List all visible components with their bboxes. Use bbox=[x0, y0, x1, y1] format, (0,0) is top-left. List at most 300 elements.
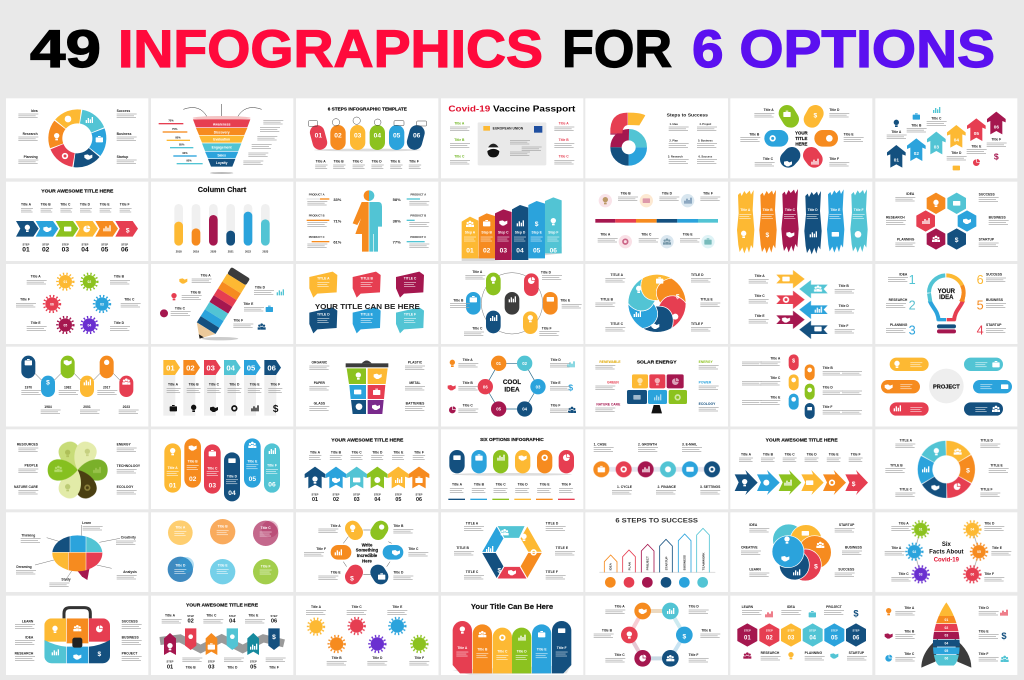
tags bbox=[163, 360, 281, 375]
heading: Column Chart bbox=[198, 185, 247, 194]
panel: spiral: TITLE D bbox=[691, 273, 704, 277]
heading: YOUR AWESOME TITLE HERE bbox=[41, 189, 114, 195]
panel: hexagons bbox=[875, 182, 1017, 261]
panel: brush strokes: Title C bbox=[785, 208, 796, 212]
panel: write something incredible: Title A bbox=[331, 524, 341, 528]
funnel layers bbox=[193, 119, 250, 167]
panel: cool idea: $ bbox=[568, 382, 573, 392]
panel: six steps outline arrows: BUSINESS bbox=[683, 555, 687, 570]
panel: hexagon row: 03 bbox=[788, 635, 795, 641]
tabs: Title A bbox=[457, 646, 468, 650]
panel: banners with title bbox=[296, 264, 438, 344]
panel: male female figure: 77% bbox=[393, 239, 401, 244]
banners: 02 bbox=[483, 248, 491, 255]
panel: 6 steps capsules: 06 bbox=[413, 132, 421, 139]
panel: funnel: Engagement bbox=[212, 146, 233, 150]
panel: ribbons: Title D bbox=[227, 665, 238, 669]
panel: hexagon row: STEP bbox=[744, 629, 751, 633]
panel: up arrows with title: Title D bbox=[372, 450, 383, 454]
panel: six options cylinders bbox=[441, 429, 583, 509]
panel: rocket: 06 bbox=[944, 657, 948, 661]
numbered nodes: 04 bbox=[522, 407, 528, 412]
panel: clover: ENERGY bbox=[117, 443, 132, 447]
panel: tall capsules: 01 bbox=[169, 483, 177, 490]
panel: petals: Title D bbox=[829, 108, 840, 112]
panel: hexagons: IDEA bbox=[906, 192, 915, 196]
panel: swirl circles: CREATIVE bbox=[741, 546, 758, 550]
panel: interlocking arrows: Title E bbox=[755, 314, 765, 318]
panel: brain puzzle: Dreaming bbox=[16, 565, 32, 569]
panel: light bulb: 6 bbox=[977, 273, 984, 287]
panel: cycle ring: Idea bbox=[31, 109, 38, 113]
panel: ribbons: Title E bbox=[248, 614, 259, 618]
panel: year timeline capsules bbox=[6, 347, 148, 427]
panel: 6 steps capsules: Title C bbox=[353, 159, 363, 163]
panel: hexagon row: PLANNING bbox=[805, 651, 822, 655]
panel: rocket: Title F bbox=[979, 652, 988, 656]
panel: virus options: Title E bbox=[31, 321, 41, 325]
panel: ribbons: STEP bbox=[250, 660, 257, 664]
panel: cool idea: COOL bbox=[503, 379, 521, 386]
panel: funnel: 95% bbox=[186, 159, 192, 163]
panel: cool idea: Title D bbox=[551, 358, 561, 362]
heading: 6 STEPS TO SUCCESS bbox=[615, 518, 699, 525]
panel: tall capsules: Title D bbox=[227, 474, 238, 478]
panel: timeline with icons: Title F bbox=[703, 191, 713, 195]
panel: watercolor blobs: Title F bbox=[261, 564, 271, 568]
banners: Step B bbox=[481, 231, 493, 235]
panel: big arrows bbox=[730, 429, 872, 509]
panel: swirl circles: $ bbox=[814, 563, 818, 570]
panel: tall capsules: Title E bbox=[247, 459, 258, 463]
panel: arrow steps: Title E bbox=[100, 203, 110, 207]
panel: ribbons: STEP bbox=[187, 614, 194, 618]
panel: brain puzzle: Study bbox=[61, 578, 71, 582]
rocket body bbox=[932, 602, 960, 666]
panel: ribbons: Title C bbox=[206, 614, 217, 618]
panel: funnel: Sales bbox=[217, 153, 226, 157]
ribbons: $ bbox=[272, 634, 276, 641]
panel: capsule ring: Title B bbox=[453, 298, 464, 302]
panel: zig-zag capsules: Title B bbox=[823, 366, 833, 370]
panel: timeline with icons: Title A bbox=[600, 233, 611, 237]
panel: puzzle ring: TITLE A bbox=[900, 439, 913, 443]
panel: cycle ring: Success bbox=[117, 109, 130, 113]
panel: six facts covid: 05 bbox=[977, 550, 981, 554]
panel: banners with title: TITLE B bbox=[360, 276, 374, 280]
panel: funnel: 70% bbox=[168, 119, 174, 123]
numbered nodes: 06 bbox=[483, 384, 488, 389]
panel: column chart: 2022 bbox=[245, 250, 251, 254]
panel: virus options: 06 bbox=[50, 302, 54, 306]
numbered nodes: 03 bbox=[536, 384, 541, 389]
panel: brain puzzle: Thinking bbox=[21, 533, 35, 537]
panel: write something incredible bbox=[296, 512, 438, 592]
panel: covid vaccine passport bbox=[441, 98, 583, 178]
panel: watercolor blobs: Title D bbox=[175, 564, 186, 568]
six shape bbox=[610, 113, 645, 160]
panel: virus options: 04 bbox=[87, 323, 91, 327]
panel: light bulb: PLANNING bbox=[890, 323, 908, 327]
panel: swirl circles: BUSINESS bbox=[845, 546, 863, 550]
panel: numbered tags: Title C bbox=[209, 383, 220, 387]
panel: hexagon ring of circles: Title D bbox=[689, 605, 699, 609]
panel: petals bbox=[730, 98, 872, 178]
panel: rising arrows: 03 bbox=[934, 144, 939, 149]
panel: arrow steps: STEP bbox=[82, 243, 89, 247]
panel: six options cylinders: Title D bbox=[518, 482, 528, 486]
panel: up arrows with title: 05 bbox=[395, 497, 401, 503]
panel: column chart: 2020 bbox=[210, 250, 217, 254]
timeline bar bbox=[595, 219, 718, 223]
panel: column chart: 2018 bbox=[176, 250, 182, 254]
panel: capsule ring: Title E bbox=[560, 298, 571, 302]
panel: write something incredible: Title B bbox=[393, 524, 404, 528]
panel: virus options: 01 bbox=[63, 280, 67, 284]
panel: male female figure: 61% bbox=[333, 239, 342, 244]
tags: 02 bbox=[186, 363, 195, 372]
panel: clover: PEOPLE bbox=[24, 464, 39, 468]
panel: hexagon row bbox=[730, 596, 872, 675]
panel: ribbons: 04 bbox=[229, 619, 236, 625]
tags: 05 bbox=[247, 363, 256, 372]
panel: ribbons: 02 bbox=[188, 619, 194, 625]
panel: numbered tags: Title A bbox=[168, 383, 179, 387]
panel: arrow steps: STEP bbox=[121, 243, 128, 247]
panel: brush strokes: Title B bbox=[763, 208, 773, 212]
banners: 04 bbox=[516, 248, 524, 255]
panel: column chart bbox=[151, 182, 293, 261]
panel: briefcase: BUSINESS bbox=[122, 635, 139, 639]
panel: rising arrows: $ bbox=[994, 151, 999, 161]
panel: number six bbox=[585, 98, 728, 178]
panel: briefcase: $ bbox=[97, 651, 101, 658]
panel: hexagon row: 06 bbox=[853, 635, 860, 641]
hexagon segments: $ bbox=[497, 567, 501, 574]
panel: virus scatter: Title E bbox=[392, 605, 403, 609]
panel: zig-zag capsules: Title D bbox=[823, 386, 833, 390]
panel: light bulb: SUCCESS bbox=[986, 273, 1003, 277]
panel: virus scatter bbox=[296, 596, 438, 675]
panel: ribbons: Title B bbox=[186, 665, 196, 669]
tags: 03 bbox=[206, 363, 215, 372]
panel: hexagons: $ bbox=[955, 237, 959, 244]
panel: rocket: Title A bbox=[904, 606, 915, 610]
panel: hexagons: BUSINESS bbox=[989, 215, 1006, 219]
panel: brush strokes: Title D bbox=[808, 208, 818, 212]
panel: tall capsules: 03 bbox=[209, 483, 216, 490]
panel: hexagon row: STEP bbox=[788, 629, 795, 633]
panel: watercolor blobs: Title C bbox=[261, 526, 271, 530]
tabs: Title F bbox=[557, 646, 567, 650]
panel: hexagon ring of circles: Title E bbox=[701, 629, 712, 633]
panel: virus options: 05 bbox=[63, 323, 67, 327]
banners: Step C bbox=[498, 231, 509, 235]
panel: ribbons: 06 bbox=[271, 619, 277, 625]
panel: pencil: Title E bbox=[243, 302, 254, 306]
panel: hexagon row: 05 bbox=[831, 635, 838, 641]
banners: Step A bbox=[465, 231, 476, 235]
panel: briefcase: PROJECT bbox=[122, 651, 137, 655]
panel: hexagon ring: TITLE C bbox=[466, 570, 479, 574]
panel: circle chain: 3. E-MAIL bbox=[682, 442, 697, 446]
panel: tall capsules: 04 bbox=[228, 490, 236, 497]
panel: tall capsules: Title A bbox=[168, 466, 178, 470]
heading: YOUR TITLE CAN BE HERE bbox=[315, 302, 420, 311]
panel: hexagon ring of circles: Title C bbox=[615, 653, 625, 657]
panel: tall capsules: 06 bbox=[268, 482, 276, 489]
panel: hexagon row: STEP bbox=[809, 629, 816, 633]
panel: 6 steps capsules: Title E bbox=[390, 159, 401, 163]
capsules: $ bbox=[46, 379, 50, 386]
panel: capsule ring: Title A bbox=[472, 270, 483, 274]
panel: circle chain: 1. CASE bbox=[594, 442, 607, 446]
panel: brain puzzle: Creativity bbox=[121, 536, 136, 540]
panel: light bulb: BUSINESS bbox=[986, 298, 1004, 302]
tabs: Title B bbox=[477, 648, 488, 652]
panel: rocket: 04 bbox=[944, 641, 948, 645]
panel: capsule ring: Title F bbox=[542, 326, 552, 330]
panel: year timeline capsules: 1982 bbox=[64, 385, 72, 389]
center heading: Six bbox=[942, 542, 951, 548]
panel: male female figure: 36% bbox=[393, 218, 401, 223]
center heading: Covid-19 bbox=[934, 558, 960, 564]
panel: big arrows: Title F bbox=[851, 453, 861, 457]
panel: hexagon row: RESEARCH bbox=[761, 651, 780, 655]
panel: ribbons: STEP bbox=[208, 660, 215, 664]
panel: virus options: Title A bbox=[31, 275, 41, 279]
panel: puzzle ring: TITLE F bbox=[980, 488, 993, 492]
panel: funnel: 75% bbox=[172, 127, 178, 131]
panel: spiral: $ bbox=[676, 293, 680, 300]
title: 49 bbox=[30, 20, 101, 79]
banners bbox=[462, 197, 562, 260]
heading: Your Title Can Be Here bbox=[471, 602, 553, 611]
panel: cool idea: Title E bbox=[551, 381, 561, 385]
panel: hexagon ring of circles bbox=[585, 596, 728, 675]
panel: solar energy: RENEWABLE bbox=[599, 360, 621, 364]
panel: rising arrows bbox=[875, 98, 1017, 178]
panel: swirl circles: STARTUP bbox=[839, 523, 855, 527]
outline arrows bbox=[604, 528, 709, 572]
panel: tall capsules: Title B bbox=[188, 460, 198, 464]
panel: up arrows with title: 03 bbox=[354, 497, 360, 503]
panel: brush strokes: Title A bbox=[740, 208, 751, 212]
panel: rising arrows: Title C bbox=[931, 117, 942, 121]
panel: six steps outline arrows: PROJECT bbox=[646, 556, 650, 570]
panel: brain puzzle bbox=[6, 512, 148, 592]
panel: year timeline capsules: 2017 bbox=[103, 385, 111, 389]
panel: hexagon ring of circles: Title A bbox=[615, 605, 625, 609]
panel: covid vaccine passport: Title C bbox=[559, 155, 569, 159]
panel: spiral bbox=[585, 264, 728, 344]
panel: six facts covid: 06 bbox=[970, 573, 974, 577]
panel: light bulb: YOUR bbox=[938, 289, 956, 295]
panel: petals: YOUR bbox=[795, 131, 808, 136]
panel: circle chain: 1. CYCLE bbox=[617, 485, 633, 489]
panel: puzzle ring: TITLE E bbox=[990, 463, 1003, 467]
panel: rocket: Title D bbox=[979, 606, 989, 610]
panel: write something incredible: Write bbox=[362, 542, 373, 547]
panel: male female figure: PRODUCT A bbox=[309, 192, 325, 196]
panel: pencil: Title A bbox=[201, 274, 211, 278]
panel: zig-zag capsules: Title A bbox=[770, 357, 781, 361]
panel: interlocking arrows: Title C bbox=[755, 294, 765, 298]
panel: virus options: Title F bbox=[20, 298, 30, 302]
panel: interlocking arrows: Title F bbox=[839, 324, 848, 328]
panel: puzzle ring: $ bbox=[966, 468, 970, 475]
panel: up arrows with title: Title C bbox=[352, 450, 362, 454]
panel: pencil: Title C bbox=[175, 306, 186, 310]
panel: numbered tags: Title B bbox=[189, 383, 199, 387]
panel: zig-zag capsules: Title C bbox=[770, 376, 781, 380]
panel: banners with title: TITLE D bbox=[317, 313, 330, 317]
panel: solar energy: GREEN bbox=[607, 381, 619, 385]
panel: interlocking arrows: Title D bbox=[839, 304, 849, 308]
panel: capsule ring bbox=[441, 264, 583, 344]
columns bbox=[174, 204, 270, 246]
panel: arrow steps: STEP bbox=[62, 243, 69, 247]
panel: year timeline capsules: 2001 bbox=[83, 405, 91, 409]
panel: six steps outline arrows: IDEA bbox=[609, 562, 613, 570]
panel: male female figure: 58% bbox=[393, 197, 401, 202]
panel: arrow steps: 01 bbox=[22, 246, 30, 253]
panel: hexagon ring of circles: Title F bbox=[689, 653, 698, 657]
panel: hexagon ring: TITLE D bbox=[546, 521, 559, 525]
panel: funnel bbox=[151, 98, 293, 178]
panel: cycle ring bbox=[6, 98, 148, 178]
panel: male female figure bbox=[296, 182, 438, 261]
panel: number six: 6. Success bbox=[698, 155, 713, 159]
panel: circle chain bbox=[585, 429, 728, 509]
panel: ribbons bbox=[151, 596, 293, 675]
panel: six steps outline arrows: TEAMWORK bbox=[701, 552, 705, 570]
panel: light bulb: 1 bbox=[909, 273, 916, 287]
panel: light bulb: 2 bbox=[909, 298, 916, 312]
panel: hexagon row: STARTUP bbox=[849, 651, 865, 655]
panel: numbered tags: Title F bbox=[270, 383, 280, 387]
passport card bbox=[478, 122, 546, 165]
banners: Step F bbox=[548, 231, 558, 235]
panel: virus scatter: Title F bbox=[414, 656, 424, 660]
panel: rising arrows: Title B bbox=[911, 123, 922, 127]
panel: up arrows with title: STEP bbox=[353, 493, 360, 497]
panel: hexagon row: 02 bbox=[766, 635, 773, 641]
panel: year timeline capsules: 2023 bbox=[123, 405, 130, 409]
panel: column chart: 2021 bbox=[228, 250, 234, 254]
panel: petals: Title E bbox=[844, 132, 854, 136]
figure bbox=[353, 190, 382, 252]
panel: hexagon row: 01 bbox=[744, 635, 751, 641]
panel: hexagon ring of circles: Title B bbox=[602, 629, 613, 633]
panel: timeline with icons: Title E bbox=[683, 233, 693, 237]
panel: rocket: 02 bbox=[944, 626, 948, 630]
panel: covid vaccine passport: Title A bbox=[454, 121, 465, 125]
panel: ribbons: 03 bbox=[208, 664, 214, 670]
panel: virus options bbox=[6, 264, 148, 344]
panel: timeline with icons: Title D bbox=[662, 191, 673, 195]
panel: covid vaccine passport: Title C bbox=[454, 155, 465, 159]
panel: your title can be here bbox=[441, 596, 583, 675]
banners: 05 bbox=[533, 248, 541, 255]
panel: petals: Title B bbox=[749, 132, 760, 136]
panel: hexagon row: STEP bbox=[766, 629, 773, 633]
panel: virus scatter: Title D bbox=[372, 656, 383, 660]
panel: pencil bbox=[151, 264, 293, 344]
panel: pencil: Title D bbox=[255, 285, 266, 289]
panel: interlocking arrows: Title A bbox=[755, 274, 765, 278]
panel: recycle bin bbox=[296, 347, 438, 427]
panel: big arrows: Title A bbox=[741, 453, 752, 457]
panel: rising arrows: Title A bbox=[891, 130, 902, 134]
numbered nodes: 02 bbox=[522, 361, 528, 366]
panel: arrow steps: Title F bbox=[120, 203, 130, 207]
panel: spiral: TITLE E bbox=[700, 298, 713, 302]
panel: tall capsules: Title C bbox=[207, 466, 218, 470]
ribbons bbox=[164, 628, 280, 655]
panel: up arrows with title: 01 bbox=[312, 497, 318, 503]
panel: write something incredible: $ bbox=[350, 575, 354, 582]
panel: recycle bin: PAPER bbox=[314, 381, 326, 385]
panel: capsule ring: Title D bbox=[541, 270, 552, 274]
ring bbox=[925, 448, 968, 491]
panel: arrow steps: 02 bbox=[42, 246, 50, 253]
panel: male female figure: PRODUCT A bbox=[410, 192, 426, 196]
connectors bbox=[629, 611, 684, 658]
panel: watercolor blobs: Title B bbox=[218, 525, 228, 529]
panel: light bulb: RESEARCH bbox=[889, 298, 908, 302]
panel: covid vaccine passport: Title B bbox=[559, 138, 569, 142]
panel: number six: 2. Plan bbox=[669, 138, 678, 142]
panel: spiral: TITLE B bbox=[600, 298, 614, 302]
panel: hexagon ring bbox=[441, 512, 583, 592]
tabs bbox=[453, 621, 571, 673]
panel: petals: HERE bbox=[795, 141, 807, 146]
panel: male female figure: PRODUCT B bbox=[410, 214, 426, 218]
panel: briefcase: IDEA bbox=[25, 635, 34, 639]
panel: hexagon ring: TITLE B bbox=[456, 546, 470, 550]
panel: funnel: 80% bbox=[175, 135, 181, 139]
panel: big arrows: Title E bbox=[829, 453, 839, 457]
panel: up arrows with title: 06 bbox=[416, 497, 422, 503]
panel: project pills bbox=[875, 347, 1017, 427]
hexagon segments bbox=[481, 526, 543, 579]
panel: ribbons: STEP bbox=[271, 614, 278, 618]
title: FOR bbox=[562, 20, 672, 79]
panel: arrow steps: Title C bbox=[60, 203, 71, 207]
heading: SOLAR ENERGY bbox=[637, 360, 677, 366]
tabs: Title E bbox=[537, 648, 547, 652]
panel: six options cylinders: Title A bbox=[452, 482, 463, 486]
panel: numbered tags: Title E bbox=[250, 383, 260, 387]
panel: male female figure: PRODUCT C bbox=[309, 235, 325, 239]
panel: arrow steps: STEP bbox=[23, 243, 30, 247]
panel: arrow steps: 04 bbox=[81, 246, 89, 253]
panel: numbered tags: $ bbox=[273, 404, 279, 415]
banners: 01 bbox=[466, 248, 474, 255]
panel: arrow steps: 03 bbox=[62, 246, 69, 253]
heading: YOUR AWESOME TITLE HERE bbox=[766, 438, 838, 444]
panel: zig-zag capsules: Title E bbox=[770, 395, 781, 399]
panel: hexagon row: $ bbox=[853, 609, 859, 619]
petals bbox=[48, 438, 108, 502]
panel: 6 steps capsules: 02 bbox=[334, 132, 342, 139]
title: INFOGRAPHICS bbox=[118, 20, 543, 79]
panel: briefcase: SUCCESS bbox=[122, 619, 139, 623]
panel: timeline with icons: Title B bbox=[621, 191, 631, 195]
panel: six facts covid: 03 bbox=[919, 573, 923, 577]
panel: banners with title: TITLE E bbox=[360, 313, 374, 317]
